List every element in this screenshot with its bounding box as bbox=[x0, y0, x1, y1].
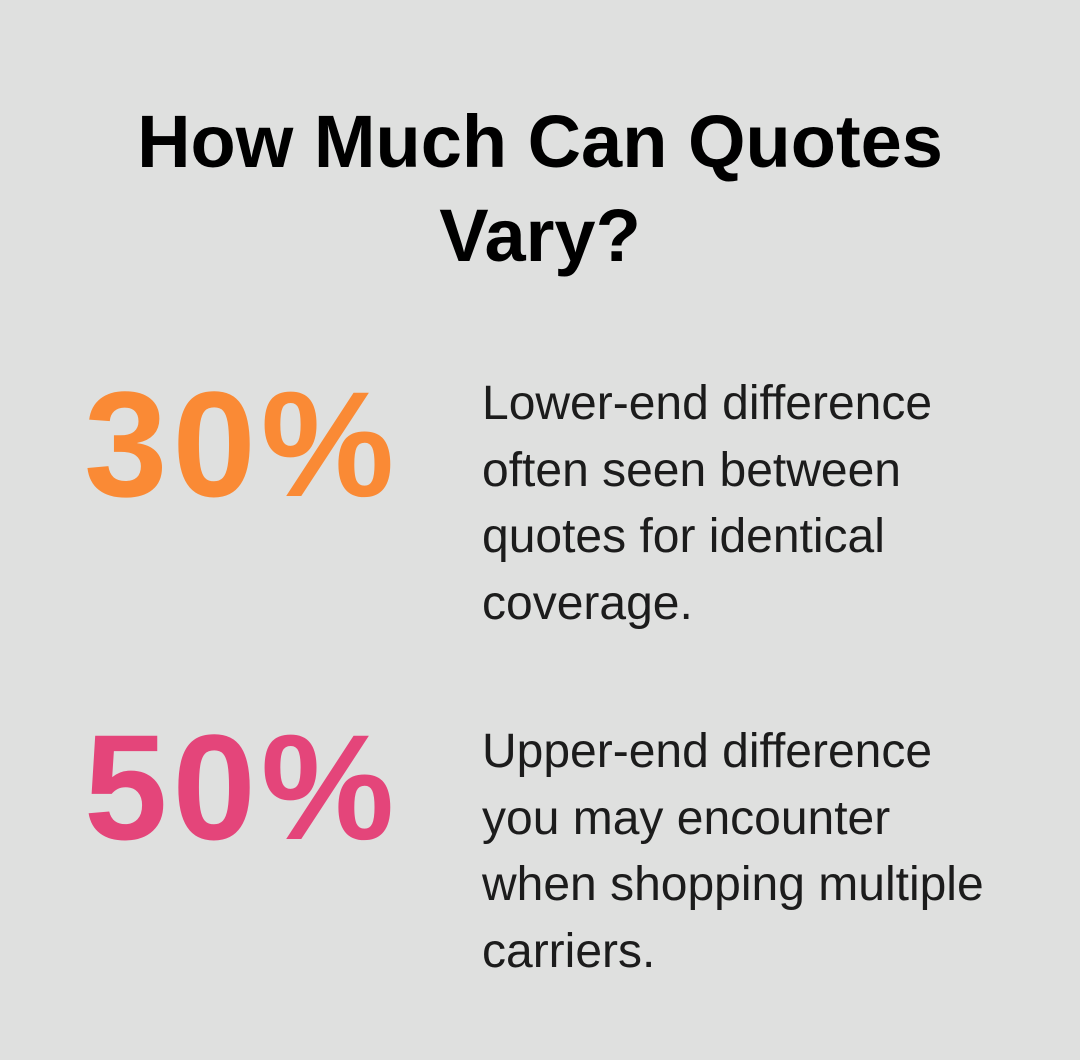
stat: 30%: 30% bbox=[84, 360, 399, 528]
text: 50% description: you may encounter bbox=[482, 792, 890, 844]
title bbox=[137, 100, 943, 277]
text: 50% description: Upper-end difference bbox=[482, 725, 932, 778]
title: How Much Can Quotes bbox=[137, 100, 943, 183]
text: 50% description bbox=[482, 725, 984, 978]
title: Vary? bbox=[439, 194, 641, 277]
text: 30% description: quotes for identical bbox=[482, 510, 885, 563]
text: 30% description: Lower-end difference bbox=[482, 377, 932, 430]
text: 50% description: carriers. bbox=[482, 924, 655, 978]
text: 30% description: coverage. bbox=[482, 576, 693, 630]
text: 30% description bbox=[482, 377, 932, 630]
text: 50% description: when shopping multiple bbox=[482, 858, 984, 911]
stat: 50%: 50% bbox=[84, 703, 399, 871]
text: 30% description: often seen between bbox=[482, 444, 901, 496]
